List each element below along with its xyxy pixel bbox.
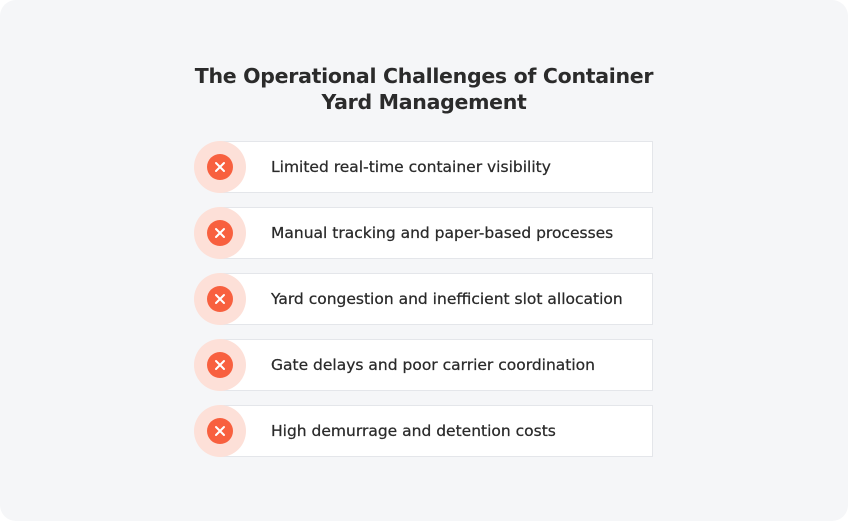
row: visibility: Limited real-time container visibility: [271, 158, 551, 176]
row: gate delays: Gate delays and poor carrier coordination: [271, 356, 595, 374]
icon: x: [194, 207, 246, 259]
icon: x: [194, 273, 246, 325]
row: demurrage: High demurrage and detention costs: [271, 422, 556, 440]
row: gate delays: [194, 339, 653, 391]
icon: x: [194, 339, 246, 391]
row: manual tracking: Manual tracking and paper-based processes: [271, 224, 613, 242]
title: Yard Management: [321, 90, 527, 114]
row: congestion: [194, 273, 653, 325]
icon: x: [194, 405, 246, 457]
row: congestion: Yard congestion and inefficient slot allocation: [271, 290, 623, 308]
row: visibility: [194, 141, 653, 193]
icon: x: [194, 141, 246, 193]
title: [194, 64, 654, 114]
row: manual tracking: [194, 207, 653, 259]
title: The Operational Challenges of Container: [195, 64, 653, 88]
row: demurrage: [194, 405, 653, 457]
